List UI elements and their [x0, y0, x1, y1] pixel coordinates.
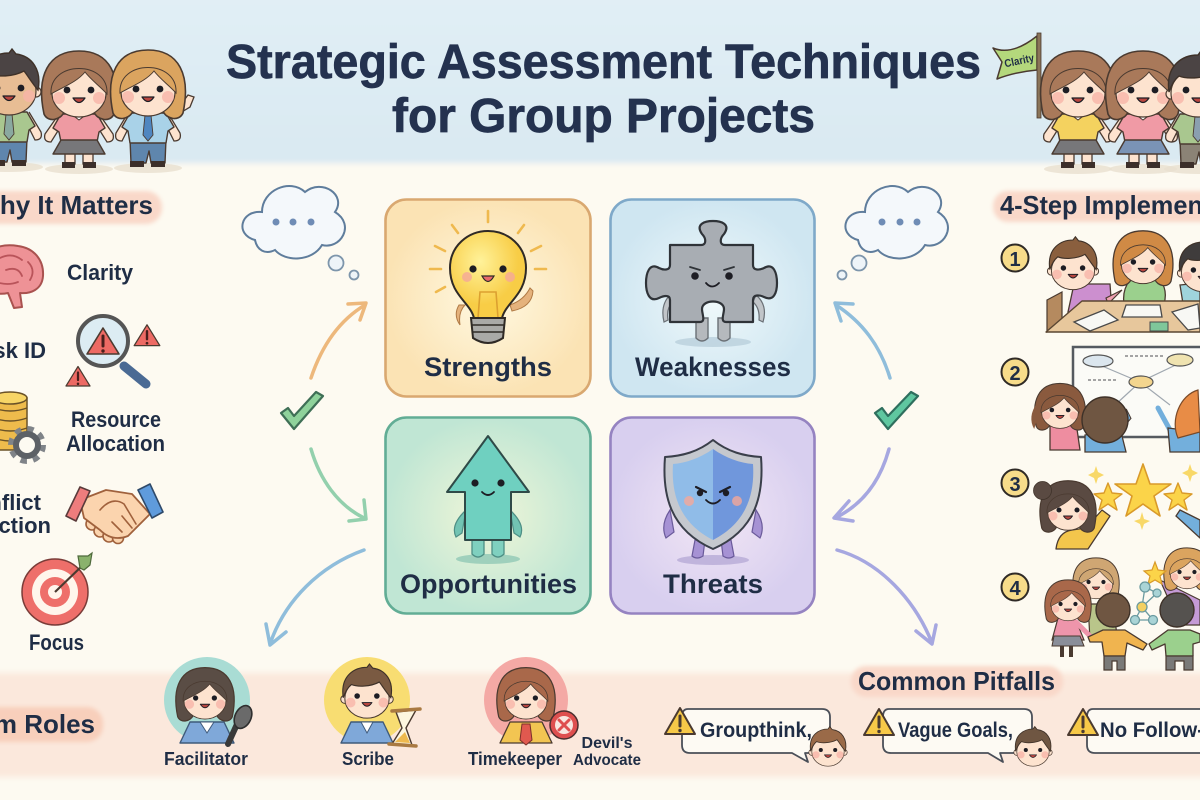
step 2 badge: 2: [1009, 363, 1021, 385]
step 4 badge: 4: [1009, 578, 1021, 600]
callout: vague goals: [864, 709, 1052, 766]
icon: puzzle piece: [646, 221, 777, 347]
step 1 badge: 1: [1009, 249, 1021, 271]
panel: strengths: [386, 200, 590, 396]
label: scribe: Scribe: [342, 749, 394, 769]
thought cloud left: [242, 186, 358, 280]
label: facilitator: Facilitator: [164, 749, 248, 769]
step 1 badge: [1002, 244, 1028, 272]
panel: common pitfalls: [665, 666, 1200, 766]
panel: 4-step implementation: [993, 190, 1200, 670]
icon: up arrow: [447, 436, 529, 564]
callout: vague goals: Vague Goals,: [898, 719, 1013, 742]
arrow: to threats: [834, 449, 889, 521]
icon: magnifier with warnings: [66, 316, 160, 386]
step 3 badge: 3: [1009, 474, 1021, 496]
panel: opportunities: [386, 418, 590, 614]
arrow: to weaknesses: [835, 303, 890, 378]
label: strengths: Strengths: [424, 352, 552, 382]
step 4 scene: team circle: [1045, 548, 1200, 670]
label: focus: Focus: [29, 630, 84, 655]
label: threats: Threats: [663, 569, 763, 599]
panel: weaknesses: [610, 200, 814, 396]
label: conflict reduction: [0, 490, 51, 538]
check mark right: [875, 392, 918, 429]
role: timekeeper: [468, 657, 578, 769]
step 3 badge: [1002, 470, 1028, 496]
arrow: down to team roles: [266, 550, 364, 645]
icon: x badge: [550, 711, 578, 739]
label: weaknesses: Weaknesses: [635, 352, 791, 382]
icon: hourglass: [389, 709, 420, 746]
label: clarity: Clarity: [67, 260, 134, 285]
icon: handshake: [66, 484, 163, 544]
role: scribe: [324, 657, 420, 769]
callout: groupthink: [665, 708, 847, 766]
header band: [0, 0, 1200, 163]
panel: why it matters: [0, 190, 165, 655]
label: devil's advocate: [573, 735, 641, 769]
label: opportunities: Opportunities: [400, 569, 577, 599]
step 4 badge: [1002, 574, 1028, 600]
arrow: down to pitfalls: [837, 550, 936, 644]
label: devil's advocate: Advocate: [573, 752, 641, 769]
panel: team roles: [0, 657, 641, 769]
title: Strategic Assessment Techniques: [226, 36, 981, 89]
label: devil's advocate: Devil's: [582, 735, 633, 752]
icon: brain: [0, 245, 43, 308]
check mark left: [281, 392, 323, 429]
title: [226, 36, 981, 143]
step 2 badge: [1002, 358, 1028, 386]
icon: coins and gear: [0, 392, 42, 460]
arrow: to opportunities: [311, 449, 366, 521]
label: timekeeper: Timekeeper: [468, 749, 562, 769]
network: [1130, 582, 1161, 624]
icon: light bulb: [430, 211, 546, 343]
callout: groupthink: Groupthink,: [700, 719, 812, 742]
label: resource allocation: [66, 407, 165, 456]
step 3 scene: stars: [1034, 464, 1200, 549]
header characters right with flag: [993, 33, 1200, 174]
panel: threats: [610, 418, 814, 614]
flag: [993, 33, 1041, 118]
callout: no follow-through: [1068, 709, 1200, 753]
thought cloud right: [838, 186, 948, 280]
label: resource allocation: Allocation: [66, 431, 165, 456]
icon: microphone: [228, 703, 255, 744]
step 2 scene: whiteboard: [1031, 347, 1200, 452]
step 1 scene: table meeting: [1046, 231, 1200, 332]
role: facilitator: [164, 657, 255, 769]
icon: shield: [664, 440, 762, 565]
header characters left: [0, 49, 194, 174]
icon: target: [22, 553, 92, 625]
flag: Clarity: [1003, 52, 1036, 70]
label: resource allocation: Resource: [71, 407, 161, 432]
heading: common pitfalls: Common Pitfalls: [858, 666, 1055, 696]
title: for Group Projects: [392, 90, 815, 143]
arrow: to strengths: [311, 303, 366, 378]
bottom band: [0, 673, 1200, 777]
